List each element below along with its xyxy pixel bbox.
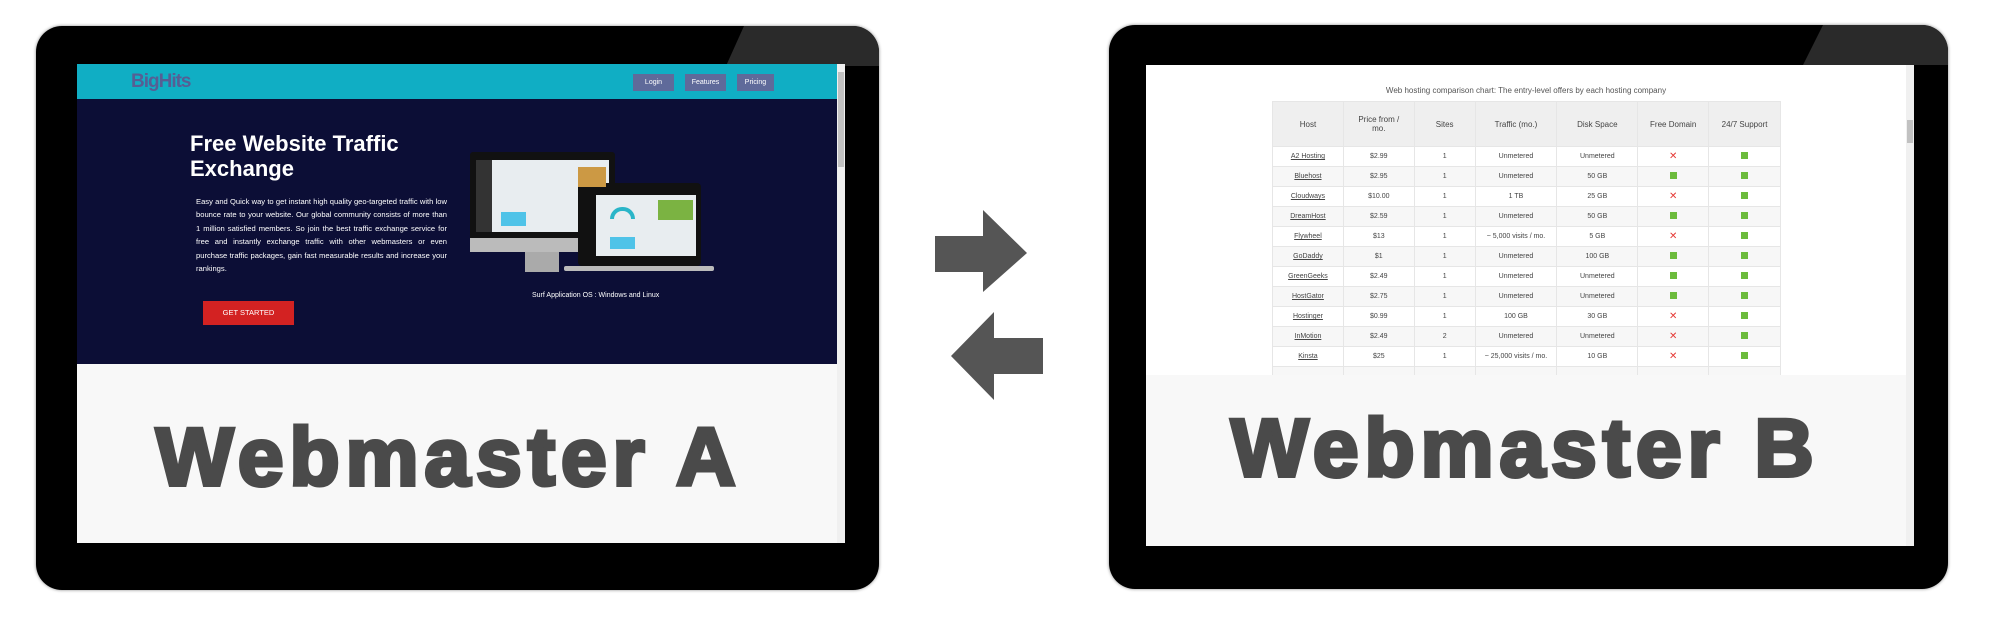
comparison table: Unmetered — [1580, 153, 1615, 160]
devices illustration — [470, 152, 714, 272]
comparison table: 100 GB — [1504, 313, 1528, 320]
comparison table: Traffic (mo.) — [1495, 120, 1537, 128]
screen B — [1146, 65, 1914, 546]
bezel glare — [1803, 25, 1948, 65]
comparison table: Unmetered — [1499, 293, 1533, 300]
comparison table: 1 TB — [1509, 193, 1523, 200]
caption: OS: Surf Application OS : Windows and Linux — [532, 292, 659, 299]
comparison table: 1 — [1443, 153, 1447, 160]
comparison table: 1 — [1443, 273, 1447, 280]
comparison table: Bluehost — [1294, 173, 1322, 180]
comparison table: 1 — [1443, 193, 1447, 200]
logo: BigHits: BigHits — [131, 71, 190, 92]
scrollbar — [837, 64, 845, 543]
button: get started: GET STARTED — [223, 308, 274, 317]
bezel glare — [727, 26, 879, 66]
comparison table: ✕ — [1669, 191, 1677, 202]
comparison table: Unmetered — [1580, 333, 1615, 340]
comparison table: 1 — [1443, 313, 1447, 320]
tablet: Webmaster B — [1109, 25, 1948, 589]
comparison table: Unmetered — [1499, 213, 1533, 220]
comparison table: 25 GB — [1587, 193, 1607, 200]
hero title — [190, 131, 399, 181]
comparison table: Host — [1300, 120, 1316, 128]
comparison table: Free Domain — [1650, 120, 1696, 128]
comparison table: $2.95 — [1370, 173, 1388, 180]
nav buttons: Features — [692, 79, 719, 86]
comparison table: 1 — [1443, 253, 1447, 260]
comparison table: $25 — [1373, 353, 1385, 360]
comparison table: DreamHost — [1290, 213, 1326, 220]
comparison table: 24/7 Support — [1722, 120, 1767, 128]
nav buttons — [633, 74, 774, 91]
comparison table: $2.75 — [1370, 293, 1388, 300]
comparison table: ~ 25,000 visits / mo. — [1485, 353, 1547, 360]
comparison table: A2 Hosting — [1291, 153, 1325, 160]
comparison table: Unmetered — [1580, 293, 1615, 300]
comparison table: 2 — [1443, 333, 1447, 340]
comparison table: 1 — [1443, 213, 1447, 220]
lower panel — [1146, 375, 1906, 546]
button: get started — [203, 301, 294, 325]
hero paragraph: Easy and Quick way to get instant high quality geo-targeted traffic with low bounce rate to your website. Our global community consists of more than 1 million satisfied members. So join the best traffic exchange service for free and instantly exchange traffic with other webmasters or even purchase traffic packages, gain fast measurable results and increase your rankings. — [196, 197, 447, 273]
comparison table: $10.00 — [1368, 193, 1390, 200]
comparison table — [1272, 101, 1781, 375]
comparison table: $13 — [1373, 233, 1385, 240]
comparison table: Disk Space — [1577, 120, 1618, 128]
comparison table: ~ 5,000 visits / mo. — [1487, 233, 1545, 240]
comparison table: $2.59 — [1370, 213, 1388, 220]
comparison table: GoDaddy — [1293, 253, 1323, 260]
comparison table: Unmetered — [1499, 253, 1533, 260]
comparison table: Cloudways — [1291, 193, 1325, 200]
comparison table: Unmetered — [1499, 153, 1533, 160]
comparison table: 10 GB — [1587, 353, 1607, 360]
chart caption: Web hosting comparison chart: The entry-level offers by each hosting company — [1386, 86, 1666, 95]
hero section — [77, 99, 837, 364]
label: Webmaster B: Webmaster B — [1231, 403, 1820, 494]
comparison table: 50 GB — [1587, 213, 1607, 220]
comparison table: Unmetered — [1499, 173, 1533, 180]
comparison table: Unmetered — [1499, 273, 1533, 280]
comparison table: 1 — [1443, 233, 1447, 240]
nav buttons: Pricing — [745, 79, 766, 86]
comparison table: HostGator — [1292, 293, 1324, 300]
comparison table: ✕ — [1669, 151, 1677, 162]
comparison table: ✕ — [1669, 331, 1677, 342]
comparison table: 1 — [1443, 293, 1447, 300]
comparison table: 1 — [1443, 173, 1447, 180]
screen A — [77, 64, 845, 543]
comparison table: Sites — [1436, 120, 1454, 128]
nav buttons: Login — [645, 79, 662, 86]
comparison table: Price from / — [1358, 115, 1399, 124]
comparison table: $2.99 — [1370, 153, 1388, 160]
comparison table: Unmetered — [1580, 273, 1615, 280]
comparison table: 1 — [1443, 353, 1447, 360]
arrow: right — [935, 210, 1027, 292]
comparison table: ✕ — [1669, 311, 1677, 322]
comparison table: $2.49 — [1370, 273, 1388, 280]
comparison table: 100 GB — [1585, 253, 1609, 260]
comparison table: $2.49 — [1370, 333, 1388, 340]
comparison table: GreenGeeks — [1288, 273, 1328, 280]
comparison table: ✕ — [1669, 351, 1677, 362]
comparison table: Unmetered — [1499, 333, 1533, 340]
comparison table: $1 — [1375, 253, 1383, 260]
tablet: Webmaster A — [36, 26, 879, 590]
comparison table: Kinsta — [1298, 353, 1318, 360]
comparison table: 5 GB — [1589, 233, 1605, 240]
comparison table: 50 GB — [1587, 173, 1607, 180]
hero title: Exchange — [190, 156, 294, 181]
scrollbar — [1906, 65, 1914, 546]
header bar — [77, 64, 837, 99]
hero title: Free Website Traffic — [190, 131, 399, 156]
comparison table: 30 GB — [1587, 313, 1607, 320]
comparison table: InMotion — [1295, 333, 1321, 340]
arrow: left — [951, 312, 1043, 400]
comparison table: Hostinger — [1293, 313, 1323, 320]
label: Webmaster A: Webmaster A — [156, 412, 742, 503]
comparison table: Flywheel — [1294, 233, 1322, 240]
comparison table: $0.99 — [1370, 313, 1388, 320]
comparison table: ✕ — [1669, 231, 1677, 242]
comparison table: mo. — [1372, 124, 1385, 133]
